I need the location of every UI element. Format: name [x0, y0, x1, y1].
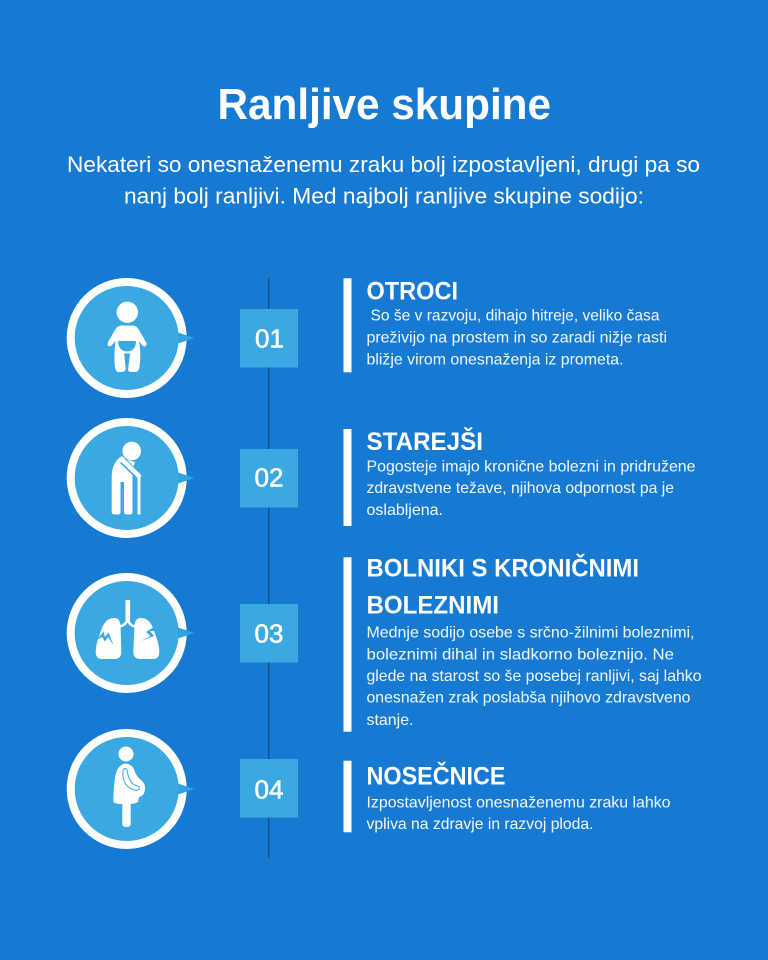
subtitle: nanj bolj ranljivi. Med najbolj ranljive skupine sodijo: — [124, 184, 644, 208]
subtitle: Nekateri so onesnaženemu zraku bolj izpostavljeni, drugi pa so — [67, 152, 700, 177]
text block: nosečnice — [366, 794, 671, 833]
text block: bolniki: glede na starost so še posebej ranljivi, saj lahko — [366, 668, 702, 685]
number box 04 — [240, 759, 298, 818]
icon: pregnant woman — [71, 733, 194, 845]
item 3: bolniki — [71, 553, 702, 732]
number box 02 — [240, 449, 298, 508]
text block: nosečnice: vpliva na zdravje in razvoj ploda. — [366, 816, 594, 833]
number box 02: 02 — [255, 463, 283, 493]
subtitle — [67, 152, 700, 208]
number box 04: 04 — [255, 774, 283, 804]
item 1: otroci — [71, 278, 667, 394]
timeline line — [268, 278, 269, 858]
text block: otroci: bližje virom onesnaženja iz prometa. — [366, 351, 624, 368]
text block: bolniki: stanje. — [366, 712, 414, 729]
bar — [344, 429, 352, 526]
text block: starejši: zdravstvene težave, njihova odpornost pa je — [366, 480, 674, 497]
item 2: starejši — [71, 422, 695, 534]
bar — [344, 278, 352, 372]
text block: bolniki — [366, 625, 702, 729]
text block: bolniki: boleznimi dihal in sladkorno boleznijo. Ne — [366, 646, 674, 663]
text block: starejši — [366, 459, 696, 519]
heading: nosečnice: NOSEČNICE — [366, 760, 506, 790]
heading: otroci: OTROCI — [366, 278, 458, 306]
title: Ranljive skupine — [218, 80, 551, 129]
bar — [344, 761, 352, 832]
number box 03: 03 — [255, 618, 283, 648]
text block: otroci: preživijo na prostem in so zaradi nižje rasti — [366, 330, 667, 346]
item 4: nosečnice — [71, 733, 671, 845]
icon: damaged lungs — [71, 577, 194, 689]
text block: starejši: oslabljena. — [366, 502, 443, 519]
heading: bolniki: BOLEZNIMI — [366, 591, 499, 619]
icon: baby — [71, 282, 194, 394]
text block: bolniki: Mednje sodijo osebe s srčno-žilnimi boleznimi, — [366, 625, 694, 642]
heading: starejši: STAREJŠI — [366, 426, 483, 456]
bar — [344, 557, 352, 732]
text block: otroci — [366, 308, 667, 368]
heading: bolniki: BOLNIKI S KRONIČNIMI — [366, 553, 639, 583]
number box 03 — [240, 604, 298, 662]
text block: bolniki: onesnažen zrak poslabša njihovo zdravstveno — [366, 690, 691, 707]
text block: starejši: Pogosteje imajo kronične bolezni in pridružene — [366, 459, 696, 476]
heading: bolniki — [366, 553, 639, 619]
number box 01: 01 — [255, 323, 284, 353]
text block: otroci: So še v razvoju, dihajo hitreje, veliko časa — [370, 308, 660, 325]
text block: nosečnice: Izpostavljenost onesnaženemu zraku lahko — [366, 794, 671, 812]
number box 01 — [240, 309, 298, 368]
icon: elderly person — [71, 422, 194, 534]
